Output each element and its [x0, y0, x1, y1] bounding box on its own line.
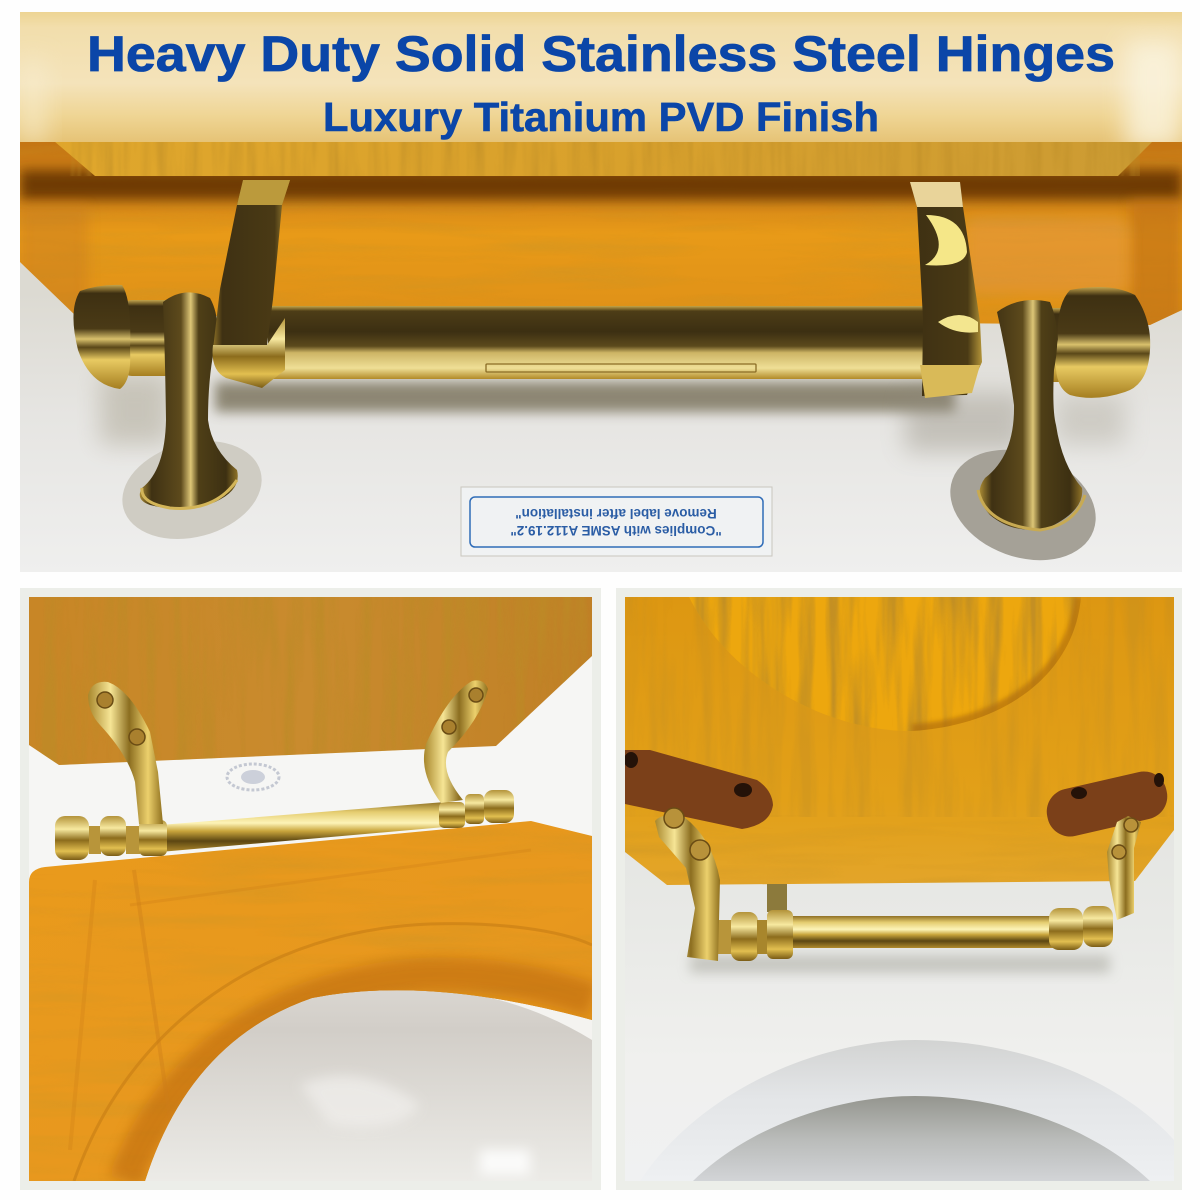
seat spring bolt: [767, 884, 787, 912]
right arm highlight: [925, 215, 967, 265]
left bumper: [624, 750, 773, 829]
subtitle: Luxury Titanium PVD Finish: [323, 94, 879, 140]
raised lid wood: [29, 597, 592, 767]
right arm top highlight: [910, 182, 963, 207]
left hinge arm: [213, 180, 290, 349]
hinge rod: [160, 802, 445, 852]
bowl reflections: [300, 988, 592, 1175]
panel: underside of seat photo: [624, 597, 1174, 1181]
left hinge arm: [655, 815, 720, 961]
rod shadow: [690, 955, 1110, 973]
screws: [664, 808, 1138, 860]
white background: [29, 656, 592, 878]
seat underside wood: [625, 597, 1174, 887]
compliance label: "Complies with ASME A112.19.2": [510, 523, 722, 538]
right foot rim: [978, 490, 1085, 530]
panel: right photo frame: [616, 588, 1182, 1190]
left collar: [213, 318, 285, 388]
left arm top highlight: [237, 180, 290, 205]
right arm glint: [938, 315, 978, 333]
panel: left photo frame: [20, 588, 601, 1190]
right knuckles: [439, 790, 514, 828]
right hinge arm: [910, 182, 982, 396]
bowl interior: [693, 1096, 1150, 1181]
main bar: [268, 306, 928, 379]
screws: [97, 688, 483, 745]
seat lip in shadow: [74, 924, 592, 1181]
right collar: [920, 365, 980, 398]
recess of seat: [680, 597, 1090, 737]
right foot: [980, 300, 1082, 530]
right end cap: [1045, 287, 1150, 398]
wooden lid: [55, 142, 1152, 176]
left foot rim: [142, 480, 237, 508]
compliance label: [461, 487, 772, 556]
left foot: [140, 292, 238, 509]
bowl: [145, 990, 592, 1181]
bowl rim: [640, 1040, 1174, 1181]
right knuckles: [1049, 906, 1113, 950]
right hinge arm: [1107, 816, 1141, 920]
right hinge arm: [424, 680, 488, 803]
shadow under bar: [100, 375, 1125, 452]
translucent banner: [20, 12, 1182, 142]
left knuckles: [55, 816, 167, 860]
panel: open lid photo: [29, 597, 594, 1181]
engraved mark on bar: [486, 364, 756, 372]
right bumper: [1042, 767, 1172, 841]
porcelain surface: [20, 262, 1182, 572]
porcelain: [625, 597, 1174, 1181]
gasket left: [122, 441, 262, 539]
panel: main close-up photo of hinge: [20, 12, 1182, 580]
wooden seat base: [20, 142, 1182, 330]
banner pale highlights: [20, 40, 1182, 150]
left knuckles: [716, 910, 793, 961]
hinge rod: [790, 916, 1062, 948]
seat wood: [29, 815, 594, 1181]
gasket right: [950, 450, 1096, 560]
compliance label: Remove label after installation": [515, 506, 717, 521]
logo stamp: [227, 764, 279, 790]
title: Heavy Duty Solid Stainless Steel Hinges: [87, 26, 1115, 82]
left hinge arm: [88, 682, 163, 824]
left end cap: [73, 284, 166, 389]
